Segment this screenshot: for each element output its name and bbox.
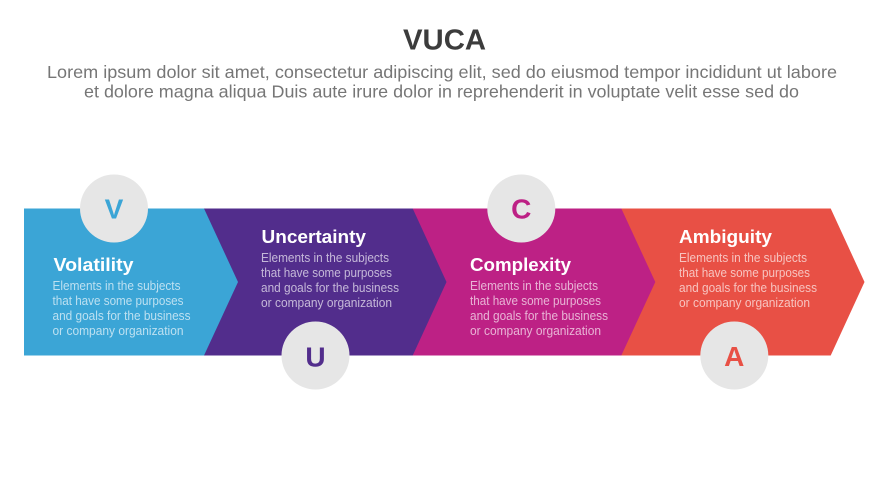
text block: ambiguity xyxy=(679,251,817,310)
icon: circle C xyxy=(487,174,555,242)
subtitle: et dolore magna aliqua Duis aute irure dolor in reprehenderit in voluptate velit esse sed do xyxy=(84,82,799,102)
subtitle: Lorem ipsum dolor sit amet, consectetur adipiscing elit, sed do eiusmod tempor incididunt ut labore xyxy=(47,62,837,82)
text block: uncertainty: Elements in the subjects xyxy=(261,251,389,265)
text block: uncertainty: or company organization xyxy=(261,296,392,310)
text block: ambiguity: that have some purposes xyxy=(679,266,810,280)
heading: ambiguity: Ambiguity xyxy=(679,227,772,247)
panel: volatility text xyxy=(52,255,190,338)
text block: volatility: Elements in the subjects xyxy=(52,279,180,293)
text block: ambiguity: and goals for the business xyxy=(679,281,817,295)
icon: circle U xyxy=(282,322,350,390)
panel: uncertainty arrow xyxy=(190,208,446,356)
text block: uncertainty xyxy=(261,251,399,310)
panel: volatility arrow xyxy=(24,208,238,356)
icon: circle C: C xyxy=(511,194,531,224)
heading: uncertainty: Uncertainty xyxy=(262,227,366,247)
panel: ambiguity text xyxy=(679,227,817,310)
text block: volatility: and goals for the business xyxy=(52,309,190,323)
text block: complexity xyxy=(470,279,608,338)
panel: ambiguity arrow xyxy=(600,208,864,356)
icon: circle A xyxy=(700,322,768,390)
text block: complexity: or company organization xyxy=(470,324,601,338)
text block: volatility xyxy=(52,279,190,338)
panel: complexity arrow xyxy=(400,208,655,356)
panel: uncertainty text xyxy=(261,227,399,310)
text block: complexity: Elements in the subjects xyxy=(470,279,598,293)
subtitle xyxy=(47,62,837,102)
icon: circle A: A xyxy=(724,341,744,372)
text block: complexity: and goals for the business xyxy=(470,309,608,323)
heading: complexity: Complexity xyxy=(470,255,571,275)
text block: volatility: that have some purposes xyxy=(52,294,184,308)
text block: uncertainty: and goals for the business xyxy=(261,281,399,295)
text block: uncertainty: that have some purposes xyxy=(261,266,392,280)
panel: complexity text xyxy=(470,255,608,338)
icon: circle V: V xyxy=(105,194,124,224)
text block: ambiguity: Elements in the subjects xyxy=(679,251,807,265)
text block: ambiguity: or company organization xyxy=(679,296,810,310)
heading: volatility: Volatility xyxy=(54,255,134,275)
icon: circle U: U xyxy=(305,342,326,372)
text block: complexity: that have some purposes xyxy=(470,294,601,308)
title: VUCA xyxy=(403,24,486,56)
icon: circle V xyxy=(80,174,148,242)
text block: volatility: or company organization xyxy=(52,324,184,338)
